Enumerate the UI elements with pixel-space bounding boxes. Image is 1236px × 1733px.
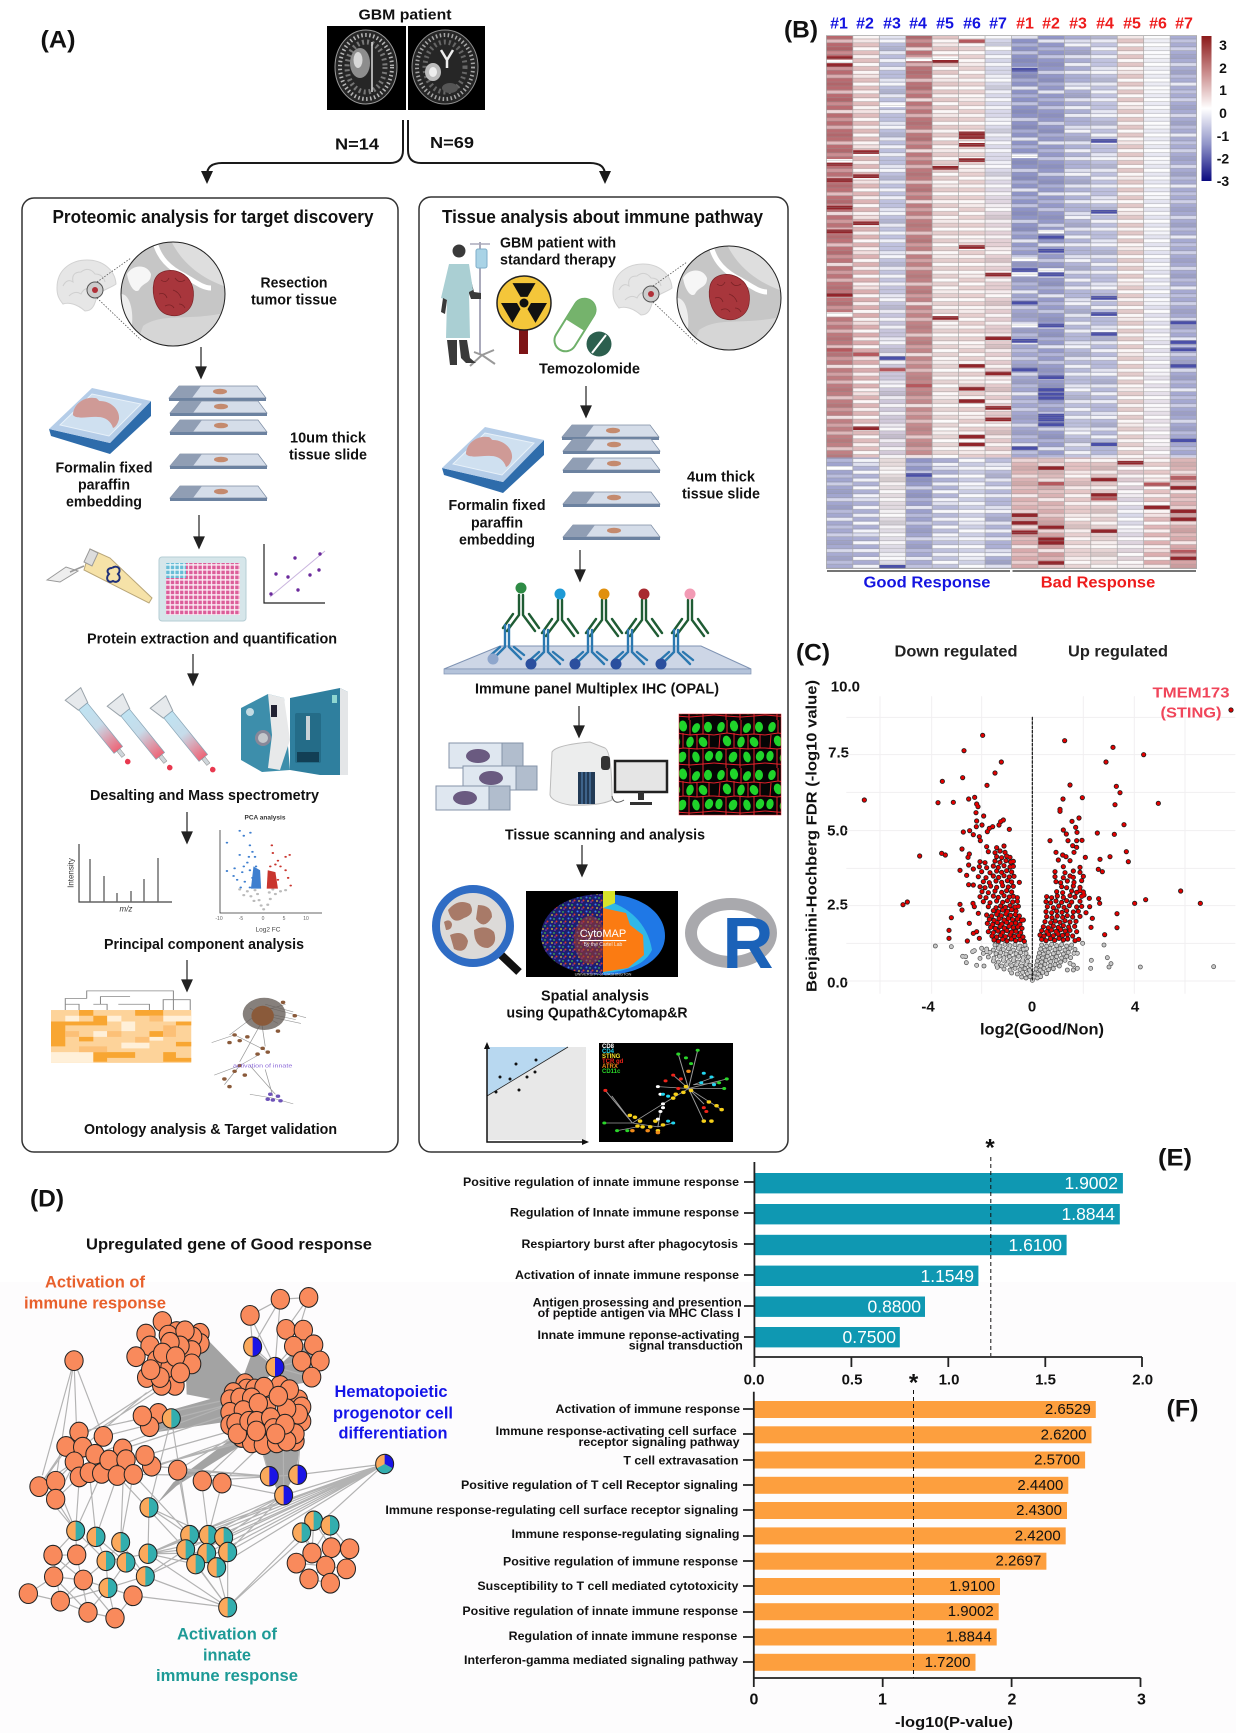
category labels: Positive regulation of innate immune response: [463, 1175, 739, 1189]
text: temozolomide: Temozolomide: [539, 360, 640, 378]
y tick labels: [827, 678, 860, 992]
bar values: 0.8800: [867, 1296, 921, 1316]
icon: R logo: [691, 904, 774, 984]
panel D label: (D): [30, 1186, 64, 1212]
bar values: 0.7500: [842, 1327, 896, 1347]
text: formalin: [56, 460, 152, 510]
icon: tissue slides: [562, 425, 660, 540]
panel: proteomic analysis: [22, 198, 398, 1152]
cluster label: innate immune response: [156, 1624, 298, 1685]
text: spatial analysis: Spatial analysis: [541, 988, 649, 1004]
arrow: [194, 515, 204, 548]
category labels: Immune response-regulating signaling: [512, 1527, 740, 1541]
heading: up regulated: Up regulated: [1068, 644, 1168, 660]
text: PCA: Principal component analysis: [104, 936, 304, 953]
image: spatial cell map: ATRX: [602, 1064, 618, 1070]
column labels: #5: [936, 16, 954, 32]
x axis title: -log10(P-value): [895, 1714, 1013, 1731]
category labels: [463, 1175, 743, 1353]
category labels: Regulation of Innate immune response: [510, 1206, 739, 1220]
text: spatial analysis: using Qupath&Cytomap&R: [506, 1004, 688, 1022]
icon: scanner and monitor: [550, 742, 667, 805]
chart: mini volcano: Log2 FC: [256, 926, 281, 934]
bar values: 1.9002: [948, 1603, 994, 1620]
panel B label: (B): [784, 16, 818, 44]
category labels: Immune response-activating cell surface: [496, 1424, 737, 1438]
text: resection: Resection: [260, 274, 328, 292]
text: GBM standard therapy: [500, 234, 617, 268]
bar values: 1.1549: [920, 1266, 974, 1286]
column labels: #7: [989, 16, 1007, 32]
text: spatial analysis: [506, 988, 688, 1022]
icon: patient with IV: [441, 242, 495, 366]
bar values: 2.4400: [1017, 1477, 1063, 1494]
text: 4um: tissue slide: [682, 486, 760, 502]
panel: heatmap B: [784, 16, 1229, 592]
image: CytoMAP: CytoMAP: [580, 928, 626, 940]
icon: well plate: [159, 557, 246, 621]
cluster label: activation of immune response: immune response: [24, 1294, 166, 1312]
bars: [754, 1173, 1123, 1347]
arrow: [196, 347, 206, 378]
annotation: TMEM173: [1152, 684, 1230, 722]
branching arrows: [201, 120, 611, 184]
panel: tissue analysis: [419, 197, 789, 1152]
column labels: #4: [1096, 16, 1114, 32]
image: spatial cell map: [599, 1043, 733, 1142]
icon: brain and tumor: [57, 234, 233, 354]
chart: mass spectrum: Intensity: [66, 858, 76, 888]
asterisk: *: [985, 1134, 995, 1162]
category labels: Positive regulation of T cell Receptor signaling: [461, 1478, 738, 1492]
arrow: [182, 960, 192, 991]
text: GBM standard therapy: standard therapy: [500, 252, 617, 268]
column labels: #5: [1123, 16, 1141, 32]
text: formalin: embedding: [66, 494, 142, 510]
x tick labels: -4: [921, 998, 935, 1016]
text: 4um: [682, 468, 760, 502]
chart: mini volcano: PCA analysis: [245, 814, 286, 822]
label: good response: Good Response: [864, 574, 991, 592]
cluster label: activation of immune response: Activation of: [45, 1272, 145, 1292]
icon: desalting tubes: [65, 688, 222, 778]
label: N=69: N=69: [430, 135, 474, 152]
x tick labels: 1: [878, 1692, 887, 1708]
axes: [743, 1392, 1140, 1687]
x axis title: log2(Good/Non): [980, 1022, 1104, 1038]
colour scale legend: -3: [1217, 173, 1229, 189]
cluster label: innate immune response: immune response: [156, 1666, 298, 1685]
text: resection: tumor tissue: [251, 292, 337, 308]
text: formalin: Formalin fixed: [448, 497, 546, 514]
cluster label: hematopoietic: progenotor cell: [333, 1404, 453, 1422]
cluster label: hematopoietic: [333, 1382, 453, 1442]
cluster label: innate immune response: innate: [203, 1646, 251, 1664]
bar values: [925, 1401, 1091, 1671]
text: formalin: paraffin: [78, 476, 130, 494]
arrow: [581, 386, 591, 417]
chart: mini volcano: [215, 814, 322, 934]
image: spatial cell map: CD4: [602, 1049, 615, 1055]
bar values: 1.8844: [946, 1628, 992, 1646]
bar values: 2.4200: [1015, 1528, 1061, 1544]
text: formalin: [448, 497, 546, 548]
panel C label: (C): [796, 640, 830, 666]
x tick labels: [744, 1372, 1153, 1388]
column labels: #6: [1149, 16, 1167, 32]
significance line: [990, 1157, 992, 1356]
category labels: of peptide antigen via MHC Class I: [538, 1306, 741, 1320]
icon: temozolomide capsule: [550, 295, 612, 356]
category labels: Regulation of innate immune response: [509, 1629, 738, 1643]
arrow: [574, 706, 584, 737]
column labels: #6: [963, 16, 981, 32]
icon: mass spectrometer: [241, 688, 348, 775]
panel: volcano plot C: [796, 640, 1235, 1038]
category labels: Positive regulation of immune response: [503, 1555, 738, 1569]
label: N=14: N=14: [335, 136, 379, 154]
chart: mini network: [212, 998, 306, 1104]
icon: brain and tumor: [613, 238, 789, 358]
significance line: [912, 1390, 914, 1678]
bar values: [842, 1173, 1118, 1347]
category labels: Immune response-regulating cell surface receptor signaling: [385, 1503, 738, 1517]
heading: proteomic: Proteomic analysis for target discovery: [52, 207, 374, 227]
cluster label: hematopoietic: Hematopoietic: [334, 1382, 448, 1401]
arrow: [575, 550, 585, 581]
cluster label: activation of immune response: [24, 1272, 166, 1312]
chart: mini volcano: -10: [215, 916, 223, 922]
image: spatial cell map: STING: [602, 1054, 621, 1060]
icon: magnifier: [436, 889, 519, 972]
cluster label: hematopoietic: differentiation: [338, 1424, 448, 1442]
text: desalting: Desalting and Mass spectrometry: [90, 787, 320, 804]
annotation: TMEM173: (STING): [1160, 704, 1222, 722]
chart: mass spectrum: [66, 844, 172, 914]
chart: quadrant scatter: [484, 1042, 589, 1145]
x tick labels: 0.0: [744, 1372, 764, 1388]
category labels: Respiartory burst after phagocytosis: [522, 1237, 738, 1251]
chart: mini volcano: 10: [303, 916, 309, 922]
chart: mini volcano: -5: [239, 916, 243, 922]
image: CytoMAP: [526, 891, 678, 977]
x tick labels: 2: [1008, 1692, 1017, 1708]
image: CytoMAP: By the Cartel Lab: [584, 942, 623, 948]
MRI brain images: [327, 26, 485, 110]
category labels: Interferon-gamma mediated signaling pathway: [464, 1653, 738, 1667]
column labels: #2: [856, 16, 874, 32]
text: formalin: Formalin fixed: [56, 460, 152, 476]
column labels: #2: [1042, 16, 1060, 32]
bar values: 1.9002: [1064, 1173, 1118, 1193]
icon: radiation: [497, 276, 551, 354]
chart: mini heatmap: [51, 991, 191, 1063]
heatmap cells: [826, 36, 1197, 569]
colour scale legend: -1: [1217, 128, 1229, 144]
panel: bar chart E: [463, 1134, 1192, 1388]
text: 10um: [289, 430, 367, 464]
arrow: [577, 845, 587, 876]
bars: [754, 1401, 1096, 1671]
y tick labels: 0.0: [827, 974, 848, 992]
x tick labels: 0.5: [842, 1372, 862, 1388]
scatter points: [847, 697, 1235, 993]
y axis title: Benjamini-Hochberg FDR (-log10 value): [804, 680, 820, 992]
column labels: #3: [1069, 16, 1087, 32]
bar values: 2.5700: [1034, 1452, 1080, 1468]
category labels: signal transduction: [629, 1339, 743, 1353]
arrow: [182, 812, 192, 843]
colour scale legend: [1202, 36, 1229, 189]
bar values: 2.6200: [1041, 1426, 1086, 1444]
column labels: #1: [830, 16, 848, 32]
x tick labels: [921, 998, 1140, 1016]
panel: enrichment network D: [19, 1186, 453, 1685]
column labels: [830, 16, 1193, 32]
icon: paraffin cassette: [49, 388, 151, 454]
text: formalin: embedding: [459, 532, 535, 548]
heading: GBM patient: GBM patient: [358, 6, 452, 24]
heading: down regulated: Down regulated: [894, 644, 1018, 660]
colour scale legend: -2: [1217, 150, 1229, 166]
x tick labels: 3: [1137, 1692, 1146, 1708]
icon: paraffin cassette: [442, 427, 544, 493]
image: segmented cells: [679, 714, 781, 815]
bar values: 2.2697: [996, 1553, 1041, 1570]
y tick labels: 7.5: [828, 744, 849, 762]
chart: mini network: activation of innate: [233, 1063, 293, 1069]
text: protein extraction: Protein extraction and quantification: [87, 630, 337, 648]
text: tissue scanning: Tissue scanning and analysis: [505, 826, 705, 844]
panel E label: (E): [1158, 1144, 1192, 1172]
panel F label: (F): [1166, 1396, 1198, 1422]
group brackets: [827, 570, 1196, 572]
annotation: TMEM173: TMEM173: [1152, 684, 1230, 702]
category labels: Positive regulation of innate immune response: [462, 1604, 738, 1618]
icon: stained slides: [436, 743, 537, 810]
axes: [744, 1162, 1142, 1367]
label: bad response: Bad Response: [1041, 574, 1155, 592]
category labels: T cell extravasation: [623, 1454, 738, 1468]
category labels: [385, 1402, 740, 1667]
bar values: 1.9100: [949, 1578, 995, 1595]
arrow: [188, 654, 198, 685]
x tick labels: [750, 1692, 1146, 1708]
image: spatial cell map: CD8: [602, 1044, 615, 1050]
category labels: Antigen prosessing and presention: [533, 1295, 742, 1309]
x tick labels: 4: [1131, 998, 1140, 1016]
category labels: Activation of immune response: [556, 1402, 740, 1416]
bar values: 1.6100: [1008, 1235, 1062, 1255]
column labels: #1: [1016, 16, 1034, 32]
colour scale legend: 0: [1219, 105, 1227, 121]
icon: multiplex IHC antibodies: [444, 582, 751, 674]
x tick labels: 0: [750, 1692, 759, 1708]
colour scale legend: 3: [1219, 37, 1227, 53]
heading: upregulated gene: Upregulated gene of Good response: [86, 1236, 372, 1254]
network graph: [19, 1288, 394, 1628]
y tick labels: 10.0: [831, 678, 860, 696]
panel A label: (A): [40, 26, 76, 54]
text: 10um: 10um thick: [290, 430, 367, 446]
icon: protein tube: [47, 549, 152, 603]
x tick labels: 1.0: [939, 1372, 959, 1388]
column labels: #4: [909, 16, 927, 32]
faint lower background: [0, 1282, 1236, 1733]
column labels: #7: [1175, 16, 1193, 32]
category labels: receptor signaling pathway: [578, 1435, 740, 1449]
bar values: 2.4300: [1016, 1502, 1062, 1519]
x tick labels: 0: [1028, 998, 1036, 1016]
icon: tissue slides: [169, 386, 267, 501]
chart: mini volcano: 0: [262, 916, 265, 922]
text: 10um: tissue slide: [289, 446, 367, 464]
bar values: 1.8844: [1061, 1204, 1115, 1224]
colour scale legend: 1: [1219, 82, 1227, 98]
y tick labels: 5.0: [827, 822, 848, 840]
text: immune panel: Immune panel Multiplex IHC (OPAL): [475, 680, 719, 698]
category labels: Susceptibility to T cell mediated cytotoxicity: [477, 1579, 739, 1593]
panel: bar chart F: [385, 1370, 1198, 1731]
x tick labels: 1.5: [1035, 1372, 1056, 1388]
bar values: 1.7200: [925, 1654, 970, 1671]
category labels: Innate immune reponse-activating: [538, 1328, 740, 1342]
x tick labels: 2.0: [1132, 1372, 1153, 1388]
cluster label: innate immune response: Activation of: [177, 1624, 277, 1644]
text: formalin: paraffin: [471, 514, 523, 532]
heading: tissue: Tissue analysis about immune pathway: [442, 207, 763, 227]
bar values: 2.6529: [1045, 1401, 1091, 1418]
colour scale legend: 2: [1219, 60, 1227, 76]
image: spatial cell map: CD11c: [602, 1069, 621, 1075]
text: ontology: Ontology analysis & Target validation: [84, 1121, 337, 1138]
text: GBM standard therapy: GBM patient with: [500, 234, 616, 252]
chart: mass spectrum: m/z: [120, 904, 132, 914]
y tick labels: 2.5: [827, 896, 848, 914]
chart: small scatter: [264, 544, 325, 603]
image: CytoMAP: UNIVERSITY of WASHINGTON: [575, 972, 632, 976]
text: resection: [251, 274, 337, 308]
column labels: #3: [883, 16, 901, 32]
text: 4um: 4um thick: [687, 468, 756, 486]
icon: R logo: R: [722, 904, 774, 984]
asterisk: *: [909, 1370, 919, 1396]
image: spatial cell map: TCR gd: [602, 1059, 624, 1065]
chart: mini volcano: 5: [283, 916, 286, 922]
category labels: Activation of innate immune response: [515, 1268, 739, 1282]
